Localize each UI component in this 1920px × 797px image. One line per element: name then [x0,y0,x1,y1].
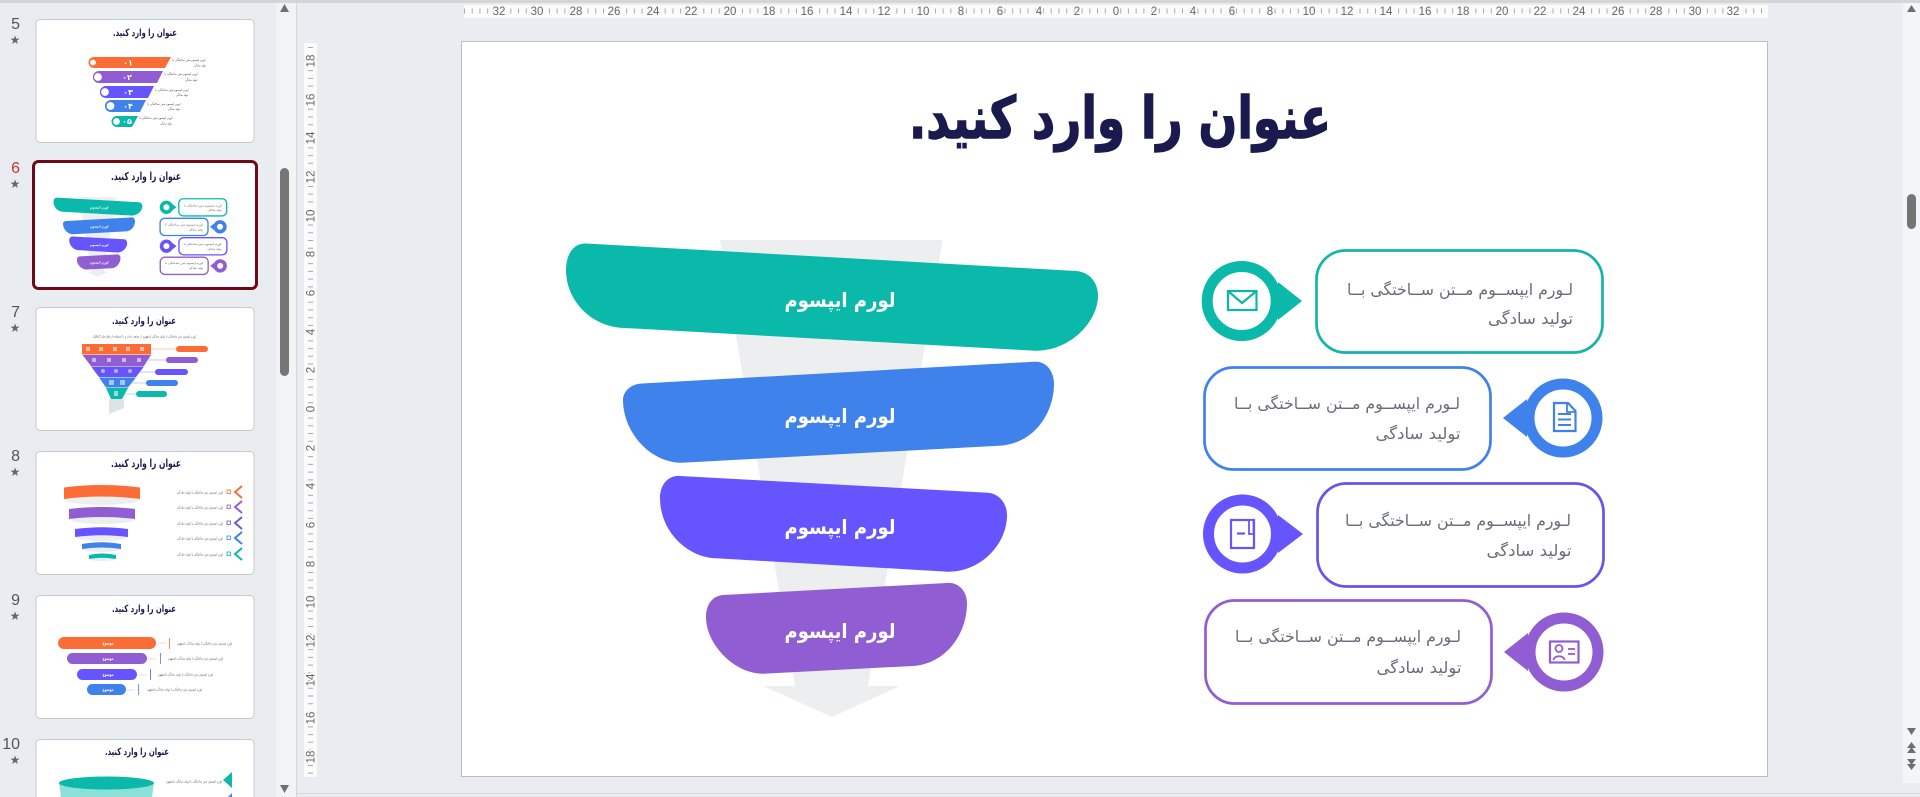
horizontal ruler: 2 [1151,6,1157,18]
funnel band 4: violet: لورم ایپسوم [784,619,896,644]
funnel band 4: violet [706,583,967,674]
callout 1: teal: لـورم ایپســوم مــتن ســاختگی بــا [1347,280,1573,300]
icon: document pin [1503,384,1597,452]
horizontal ruler: 10 [917,6,929,18]
panel: thumbnail slide 6 (selected) [10,160,256,288]
panel: thumbnail slide 8: 8 [11,448,20,465]
icon: id card pin [1504,618,1598,686]
vertical ruler [304,43,318,777]
panel: thumbnail slide 10: لورم ایپسوم متن ساختگی با تولید سادگی نامفهوم [166,778,222,784]
panel: thumbnail slide 6 (selected): عنوان را وارد کنید. [111,170,181,183]
callout 3: indigo: تولید سادگی [1486,541,1572,561]
panel: thumbnail slide 9: لورم ایپسوم متن ساختگی با تولید سادگی نامفهوم [177,640,232,646]
horizontal ruler: 32 [1727,6,1739,18]
horizontal ruler: 26 [608,6,620,18]
panel: thumbnail slide 8: لورم ایپسوم متن ساختگی با تولید سادگی [177,490,223,496]
funnel band 3: indigo [660,476,1007,572]
icon: notebook pin [1208,500,1303,568]
horizontal ruler: 18 [1457,6,1469,18]
horizontal ruler [464,5,1768,18]
horizontal ruler: 12 [1341,6,1353,18]
panel: thumbnail slide 7: لورم ایپسوم متن ساختگی با تولید سادگی نامفهوم از صنعت چاپ و با استفاده از طراحان گرافیک [93,334,196,340]
panel: thumbnail slide 5: تولید سادگی [185,77,197,82]
callout 2: blue [1204,368,1490,470]
horizontal ruler: 24 [1573,6,1586,18]
panel: thumbnail slide 7: 7 [11,304,20,321]
vertical ruler: 2 [306,367,318,373]
horizontal ruler: 4 [1036,6,1043,18]
horizontal ruler: 22 [685,6,697,18]
callout 4: violet: تولید سادگی [1376,658,1462,678]
funnel band 1: teal: لورم ایپسوم [784,288,896,313]
panel: thumbnail slide 9: موضوع [102,672,114,677]
panel: thumbnail slide 9: موضوع [102,687,114,692]
horizontal ruler: 14 [1380,6,1393,18]
vertical ruler: 8 [306,561,318,567]
vertical ruler: 0 [306,406,318,412]
left scrollbar [280,4,289,793]
vertical ruler: 10 [306,210,318,222]
funnel: background arrow [720,240,942,717]
panel: thumbnail slide 5: ★ [10,33,20,47]
panel: thumbnail slide 6 (selected): ★ [10,177,20,191]
callout 1: teal: تولید سادگی [1488,309,1573,329]
horizontal ruler: 2 [1074,6,1080,18]
horizontal ruler: 16 [1419,6,1431,18]
vertical ruler: 18 [306,751,318,763]
vertical ruler: 12 [306,635,318,647]
panel: thumbnail slide 9: ★ [10,609,20,623]
panel: thumbnail slide 5: لورم ایپسوم متن ساختگی با [140,115,172,121]
horizontal ruler: 22 [1534,6,1546,18]
vertical ruler: 14 [306,131,318,144]
panel: thumbnail slide 5: لورم ایپسوم متن ساختگی با [164,71,198,77]
vertical ruler: 4 [306,482,318,489]
vertical ruler: 6 [306,290,318,296]
funnel band 3: indigo: لورم ایپسوم [784,515,896,540]
vertical ruler: 16 [306,94,318,106]
panel: thumbnail slide 9: 9 [11,592,20,609]
panel: thumbnail slide 6 (selected): لورم ایپسوم [90,243,109,247]
panel: thumbnail slide 6 (selected): لورم ایپسوم [90,205,109,209]
panel: thumbnail slide 5: لورم ایپسوم متن ساختگی با [172,57,206,63]
vertical ruler: 14 [306,673,318,686]
horizontal ruler: 32 [493,6,505,18]
panel: thumbnail slide 9: لورم ایپسوم متن ساختگی با تولید سادگی نامفهوم [147,686,202,692]
panel: thumbnail slide 5: لورم ایپسوم متن ساختگی با [148,101,180,107]
horizontal ruler: 30 [531,6,543,18]
horizontal ruler: 14 [840,6,853,18]
panel: thumbnail slide 8: لورم ایپسوم متن ساختگی با تولید سادگی [177,504,223,510]
panel: thumbnail slide 8: لورم ایپسوم متن ساختگی با تولید سادگی [177,536,223,542]
panel: thumbnail slide 7 [10,304,254,430]
vertical ruler: 8 [306,251,318,257]
panel: thumbnail slide 5: 5 [11,16,20,33]
panel: thumbnail slide 5: تولید سادگی [168,106,180,111]
panel: main slide [462,42,1768,776]
horizontal ruler: 30 [1689,6,1701,18]
panel: thumbnail slide 5 [10,16,254,142]
vertical ruler: 4 [306,328,318,335]
panel: thumbnail slide 5: تولید سادگی [160,120,172,126]
horizontal ruler: 4 [1190,6,1197,18]
horizontal ruler: 20 [1496,6,1508,18]
panel: thumbnail slide 5: تولید سادگی [194,62,206,68]
panel: thumbnail slide 8: عنوان را وارد کنید. [111,457,181,470]
panel: thumbnail slide 5: ۰۴ [123,102,133,111]
horizontal ruler: 26 [1612,6,1624,18]
vertical ruler: 6 [306,522,318,528]
panel: thumbnail slide 6 (selected): لورم ایپسوم متن ساختگی با [165,261,203,266]
panel: thumbnail slide 8 [10,448,254,574]
vertical ruler: 18 [306,55,318,67]
vertical ruler: 12 [306,171,318,183]
callout 3: indigo [1318,484,1604,586]
panel: thumbnail slide 6 (selected): تولید سادگی [207,208,222,212]
panel: thumbnail slide 6 (selected): لورم ایپسوم [90,225,109,229]
callout 4: violet: لـورم ایپســوم مــتن ســاختگی بــا [1235,627,1461,647]
panel: thumbnail slide 6 (selected): 6 [11,160,20,177]
icon: envelope pin [1207,266,1302,336]
title: عنوان را وارد کنید. [909,84,1331,153]
horizontal ruler: 20 [724,6,736,18]
funnel band 2: blue: لورم ایپسوم [784,404,896,429]
panel: thumbnail slide 9: موضوع [102,640,114,646]
panel: thumbnail slide 6 (selected): تولید سادگی [189,266,203,270]
horizontal ruler: 10 [1303,6,1315,18]
funnel band 1: teal [566,243,1098,351]
horizontal ruler: 0 [1113,6,1119,18]
horizontal ruler: 24 [647,6,660,18]
panel: thumbnail slide 8: لورم ایپسوم متن ساختگی با تولید سادگی [177,520,223,526]
panel: thumbnail slide 6 (selected): لورم ایپسوم [90,261,109,265]
panel: thumbnail slide 6 (selected): لورم ایپسوم متن ساختگی با [184,203,222,208]
callout 2: blue: تولید سادگی [1376,424,1460,444]
panel: thumbnail slide 6 (selected): لورم ایپسوم متن ساختگی با [165,222,203,227]
callout 4: violet [1206,600,1492,704]
panel: thumbnail slide 8: ★ [10,465,20,479]
horizontal ruler: 28 [1650,6,1662,18]
panel: thumbnail slide 5: ۰۵ [122,117,132,126]
horizontal ruler: 6 [997,6,1003,18]
horizontal ruler: 28 [570,6,582,18]
panel: thumbnail slide 5: لورم ایپسوم متن ساختگی با [156,87,188,93]
vertical ruler: 16 [306,712,318,724]
panel: thumbnail slide 9 [10,592,254,718]
panel: thumbnail slide 5: عنوان را وارد کنید. [113,28,177,39]
horizontal ruler: 12 [878,6,890,18]
panel: thumbnail slide 7: ★ [10,321,20,335]
callout 3: indigo: لـورم ایپســوم مــتن ســاختگی بــا [1345,511,1571,531]
panel: thumbnail slide 10: عنوان را وارد کنید. [105,747,169,758]
panel: thumbnail slide 10: 10 [2,736,20,753]
vertical ruler: 10 [306,596,318,608]
horizontal ruler: 8 [1267,6,1273,18]
panel: thumbnail slide 9: عنوان را وارد کنید. [112,604,176,615]
panel: thumbnail slide 6 (selected): تولید سادگی [207,247,222,251]
panel: thumbnail slide 5: تولید سادگی [176,92,188,97]
panel: thumbnail slide 8: لورم ایپسوم متن ساختگی با تولید سادگی [177,552,223,558]
panel: thumbnail slide 9: لورم ایپسوم متن ساختگی با تولید سادگی نامفهوم [158,672,213,678]
panel: thumbnail slide 9: موضوع [102,656,114,661]
funnel band 2: blue [623,362,1054,463]
panel: thumbnail slide 7: عنوان را وارد کنید. [112,316,176,327]
horizontal ruler: 6 [1229,6,1235,18]
panel: thumbnail slide 5: ۰۳ [123,88,133,97]
panel: thumbnail slide 6 (selected): تولید سادگی [189,227,203,231]
panel: thumbnail slide 9: لورم ایپسوم متن ساختگی با تولید سادگی نامفهوم [168,656,223,662]
panel: thumbnail slide 5: ۰۲ [122,73,132,82]
panel: thumbnail slide 10 [2,736,254,797]
panel: thumbnail slide 10: ★ [10,753,20,767]
horizontal ruler: 18 [763,6,775,18]
panel: thumbnail slide 6 (selected): لورم ایپسوم متن ساختگی با [183,242,222,247]
panel: thumbnail slide 5: ۰۱ [123,58,133,68]
horizontal ruler: 16 [801,6,813,18]
vertical ruler: 2 [306,445,318,451]
right scrollbar [1907,5,1916,770]
callout 1: teal [1316,250,1602,352]
callout 2: blue: لـورم ایپســوم مــتن ســاختگی بــا [1234,394,1460,414]
horizontal ruler: 8 [958,6,964,18]
